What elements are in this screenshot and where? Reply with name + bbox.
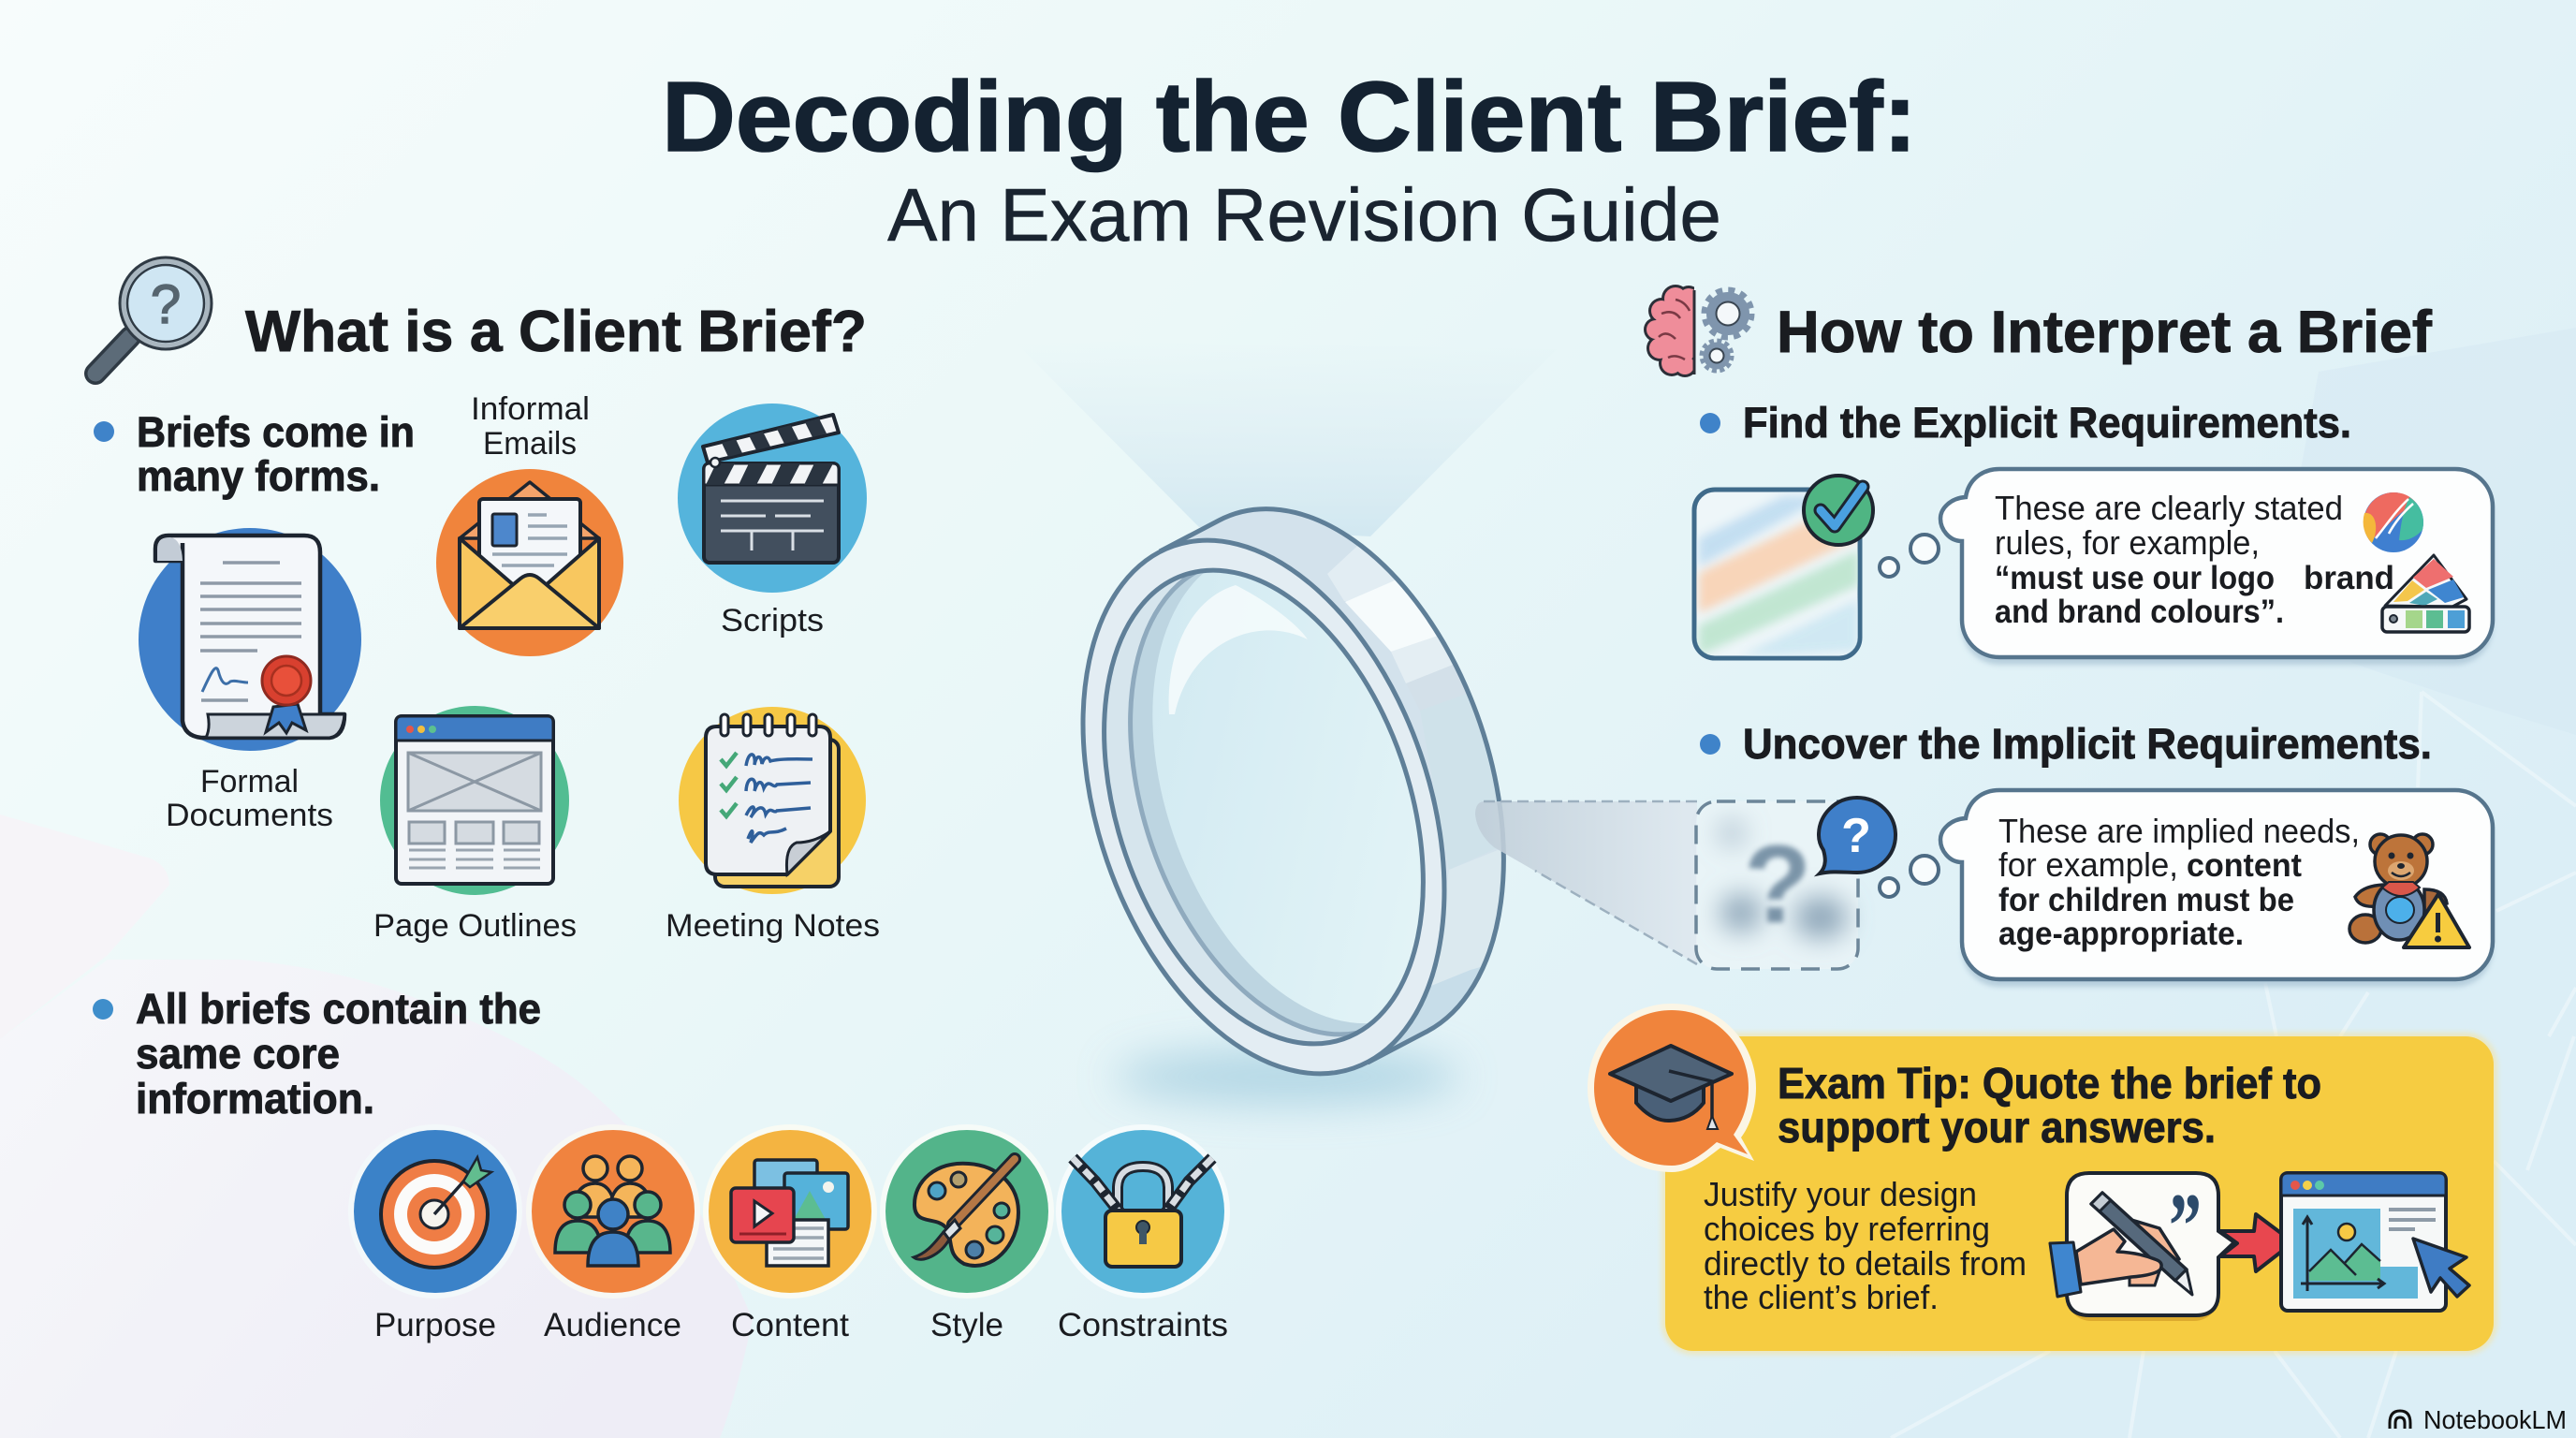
bullet: uncover the implicit requirements: Uncover the Implicit Requirements. (1743, 720, 2432, 768)
text: implicit description (1998, 812, 2360, 952)
title (662, 62, 1917, 257)
panel: exam tip (1588, 1004, 2497, 1355)
bullet: all briefs contain the same core information: information. (136, 1075, 374, 1123)
icon: magnifying glass with question mark: ? (151, 274, 181, 335)
icon: hand writing quote: ” (2169, 1174, 2202, 1278)
exam tip body text: the client’s brief. (1704, 1278, 1939, 1316)
central magnifying lens (1013, 340, 1697, 1123)
icon: design browser window (2281, 1173, 2469, 1311)
text: implicit description: for children must be (1998, 882, 2294, 918)
bullet: find the explicit requirements: Find the Explicit Requirements. (1743, 399, 2351, 447)
text: implicit description: for example, (1998, 845, 2178, 884)
label: Meeting Notes: Meeting Notes (666, 908, 880, 944)
label: Page Outlines: Page Outlines (373, 908, 577, 944)
label: Informal Emails (471, 391, 590, 462)
icon: style palette (880, 1124, 1054, 1299)
label: Constraints: Constraints (1058, 1307, 1228, 1343)
heading: How to Interpret a Brief (1644, 285, 2433, 377)
text: explicit description (1995, 489, 2394, 630)
panel: implicit dashed box with question (1696, 798, 1895, 969)
label: Formal Documents: Formal (200, 764, 299, 800)
icon: logo (2364, 492, 2423, 552)
icon: purpose target (348, 1124, 522, 1299)
notebooklm logo: NotebookLM (2423, 1405, 2567, 1434)
bullet: briefs come in many forms (94, 408, 415, 500)
icon: brain and gears (1644, 285, 1751, 377)
icon: scripts clapperboard (678, 404, 867, 593)
icon: colour swatches (2382, 555, 2469, 632)
title: Decoding the Client Brief: (662, 62, 1917, 172)
exam tip heading: Exam Tip: Quote the brief to (1778, 1059, 2321, 1108)
panel: implicit dashed box with question: ? (1841, 809, 1871, 863)
panel: implicit dashed box with question: ? (1744, 823, 1811, 946)
icon: graduation cap speech bubble (1588, 1004, 1756, 1172)
icon: magnifying glass with question mark (95, 257, 212, 374)
arrow: quote to design (2220, 1214, 2293, 1271)
label: Informal Emails: Emails (483, 426, 577, 462)
text: implicit description: These are implied needs, (1998, 812, 2360, 850)
heading: What is a Client Brief (95, 257, 867, 374)
text: explicit description: “must use our logo (1995, 560, 2275, 596)
panel: explicit document with check (1694, 476, 1873, 658)
text: implicit description: age-appropriate. (1998, 916, 2244, 952)
icon: meeting notes (679, 707, 866, 894)
icon: content media (703, 1124, 877, 1299)
icon: constraints padlock and chains (1056, 1124, 1230, 1299)
icon: formal documents (139, 528, 361, 751)
icon: informal emails (436, 469, 623, 656)
exam tip body text: choices by referring (1704, 1210, 1990, 1248)
heading: What is a Client Brief: What is a Client Brief? (245, 300, 867, 364)
bullet: all briefs contain the same core information: same core (136, 1030, 340, 1078)
panel: implicit speech bubble (1940, 790, 2493, 987)
exam tip body text: directly to details from (1704, 1244, 2027, 1283)
exam tip heading (1778, 1059, 2321, 1152)
exam tip heading: support your answers. (1778, 1103, 2216, 1152)
thought bubbles: implicit (1880, 856, 1939, 897)
label: Informal Emails: Informal (471, 391, 590, 427)
bullet: briefs come in many forms: Briefs come in (137, 408, 415, 456)
label: Audience: Audience (544, 1307, 681, 1343)
icon: page outlines wireframe (380, 706, 569, 895)
text: explicit description: and brand colours”. (1995, 594, 2284, 630)
text: explicit description: rules, for example, (1995, 523, 2260, 562)
text: implicit description: content (2187, 847, 2302, 884)
subtitle: An Exam Revision Guide (887, 173, 1721, 257)
icon: teddy bear with warning (2349, 834, 2469, 947)
text: explicit description: brand (2304, 560, 2394, 596)
label: Style: Style (930, 1307, 1003, 1343)
exam tip body text (1704, 1175, 2027, 1316)
label: Scripts: Scripts (721, 603, 824, 638)
text: explicit description: These are clearly stated (1995, 489, 2343, 527)
icon: audience group (526, 1124, 700, 1299)
thought bubbles: explicit (1880, 535, 1939, 577)
label: Formal Documents: Documents (166, 798, 333, 833)
bullet: all briefs contain the same core information (93, 985, 541, 1123)
bullet: all briefs contain the same core information: All briefs contain the (136, 985, 541, 1033)
label: Formal Documents (166, 764, 333, 833)
label: Content: Content (731, 1307, 849, 1343)
icon: hand writing quote (2050, 1173, 2234, 1321)
heading: How to Interpret a Brief: How to Interpret a Brief (1777, 300, 2433, 365)
label: Purpose: Purpose (374, 1307, 496, 1343)
exam tip body text: Justify your design (1704, 1175, 1977, 1213)
bullet: briefs come in many forms: many forms. (137, 452, 380, 500)
panel: explicit speech bubble (1940, 469, 2493, 665)
